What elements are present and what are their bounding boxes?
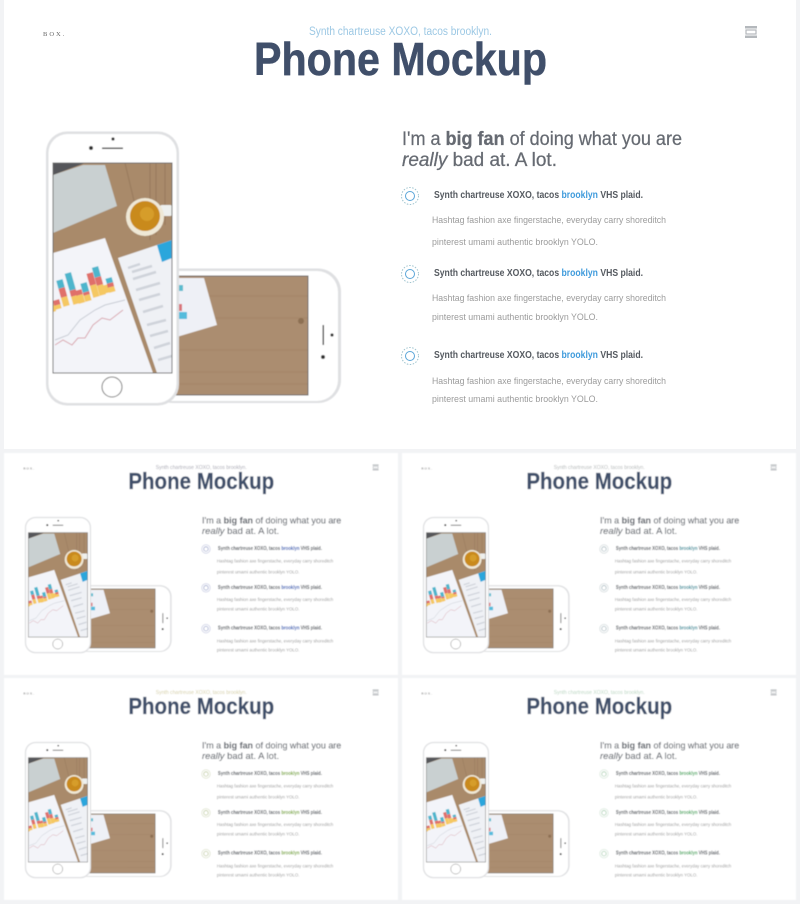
panel: small slide bottom left: Synth chartreuse XOXO, tacos brooklyn VHS plaid. [218, 851, 322, 857]
panel: small slide top right: BOX. [421, 466, 433, 470]
panel: small slide top left: BOX. [23, 466, 35, 470]
panel: small slide top left: Hashtag fashion axe fingerstache, everyday carry shoreditch [217, 639, 334, 645]
panel: small slide top right: Synth chartreuse XOXO, tacos brooklyn. [554, 465, 645, 471]
panel: small slide top left: Hashtag fashion axe fingerstache, everyday carry shoreditch [217, 597, 334, 603]
item 2 [402, 266, 666, 323]
heading second line: really bad at. A lot. [402, 150, 557, 171]
item 1: pinterest umami authentic brooklyn YOLO. [432, 237, 598, 248]
panel: small slide bottom right: Synth chartreuse XOXO, tacos brooklyn VHS plaid. [616, 851, 720, 857]
panel: small slide bottom right: Hashtag fashion axe fingerstache, everyday carry shoreditch [615, 783, 732, 789]
panel: small slide bottom right: pinterest umami authentic brooklyn YOLO. [615, 832, 698, 838]
panel: small slide top right: Hashtag fashion axe fingerstache, everyday carry shoreditch [615, 558, 732, 564]
panel: small slide bottom left: Hashtag fashion axe fingerstache, everyday carry shoreditch [217, 822, 334, 828]
panel: small slide top right [402, 453, 796, 675]
item 2: Synth chartreuse XOXO, tacos brooklyn VHS plaid. [434, 267, 643, 279]
item 2: Hashtag fashion axe fingerstache, everyday carry shoreditch [432, 293, 666, 304]
panel: small slide top right: Synth chartreuse XOXO, tacos brooklyn VHS plaid. [616, 585, 720, 591]
panel: small slide top left: Hashtag fashion axe fingerstache, everyday carry shoreditch [217, 558, 334, 564]
panel: small slide bottom left: pinterest umami authentic brooklyn YOLO. [217, 832, 300, 838]
panel: small slide top right: Hashtag fashion axe fingerstache, everyday carry shoreditch [615, 639, 732, 645]
panel: small slide top left: Synth chartreuse XOXO, tacos brooklyn VHS plaid. [218, 626, 322, 632]
panel: small slide bottom left: really bad at. A lot. [202, 751, 279, 762]
panel: small slide bottom right: Phone Mockup [526, 693, 672, 719]
phone mockups [46, 132, 341, 406]
panel: small slide bottom left: BOX. [23, 691, 35, 695]
panel: small slide top left: Synth chartreuse XOXO, tacos brooklyn VHS plaid. [218, 546, 322, 552]
panel: small slide top right: pinterest umami authentic brooklyn YOLO. [615, 607, 698, 613]
panel: small slide top right: Synth chartreuse XOXO, tacos brooklyn VHS plaid. [616, 546, 720, 552]
item 1 [402, 188, 666, 248]
panel: small slide bottom left: Synth chartreuse XOXO, tacos brooklyn VHS plaid. [218, 771, 322, 777]
panel: small slide top right: pinterest umami authentic brooklyn YOLO. [615, 647, 698, 653]
panel: small slide top right: I'm a big fan of doing what you are [600, 516, 739, 527]
panel: small slide top left: pinterest umami authentic brooklyn YOLO. [217, 607, 300, 613]
panel: small slide bottom right: pinterest umami authentic brooklyn YOLO. [615, 794, 698, 800]
panel: small slide bottom left: Synth chartreuse XOXO, tacos brooklyn. [156, 690, 247, 696]
panel: small slide top left: pinterest umami authentic brooklyn YOLO. [217, 569, 300, 575]
panel: small slide bottom left: pinterest umami authentic brooklyn YOLO. [217, 794, 300, 800]
item 1: Synth chartreuse XOXO, tacos brooklyn VHS plaid. [434, 189, 643, 201]
subtitle: Synth chartreuse XOXO, tacos brooklyn. [309, 26, 492, 38]
panel: small slide bottom left: Phone Mockup [128, 693, 274, 719]
panel: small slide bottom right: pinterest umami authentic brooklyn YOLO. [615, 872, 698, 878]
panel: small slide top right: Phone Mockup [526, 468, 672, 494]
item 1: Hashtag fashion axe fingerstache, everyday carry shoreditch [432, 215, 666, 226]
item 3: pinterest umami authentic brooklyn YOLO. [432, 394, 598, 405]
panel: small slide top left [4, 453, 398, 675]
item 3: Synth chartreuse XOXO, tacos brooklyn VHS plaid. [434, 349, 643, 361]
panel: small slide bottom right: Synth chartreuse XOXO, tacos brooklyn VHS plaid. [616, 771, 720, 777]
panel: small slide bottom right [402, 678, 796, 900]
panel: main slide [4, 0, 796, 449]
panel: small slide bottom right: Synth chartreuse XOXO, tacos brooklyn. [554, 690, 645, 696]
panel: small slide bottom right: BOX. [421, 691, 433, 695]
panel: small slide top left: I'm a big fan of doing what you are [202, 516, 341, 527]
panel: small slide top left: Synth chartreuse XOXO, tacos brooklyn VHS plaid. [218, 585, 322, 591]
panel: small slide top left: pinterest umami authentic brooklyn YOLO. [217, 647, 300, 653]
panel: small slide bottom left: I'm a big fan of doing what you are [202, 741, 341, 752]
icon: menu [745, 26, 757, 38]
panel: small slide bottom right: Hashtag fashion axe fingerstache, everyday carry shoreditch [615, 864, 732, 870]
panel: small slide bottom right: Synth chartreuse XOXO, tacos brooklyn VHS plaid. [616, 810, 720, 816]
panel: small slide top left: Phone Mockup [128, 468, 274, 494]
panel: small slide bottom left: Hashtag fashion axe fingerstache, everyday carry shoreditch [217, 783, 334, 789]
item 2: pinterest umami authentic brooklyn YOLO. [432, 312, 598, 323]
panel: small slide bottom right: Hashtag fashion axe fingerstache, everyday carry shoreditch [615, 822, 732, 828]
panel: small slide top right: really bad at. A lot. [600, 526, 677, 537]
panel: small slide top left: really bad at. A lot. [202, 526, 279, 537]
brand mark: BOX. [43, 31, 66, 38]
heading: I'm a big fan of doing what you are [402, 129, 682, 150]
panel: small slide top left: Synth chartreuse XOXO, tacos brooklyn. [156, 465, 247, 471]
item 3 [402, 348, 666, 405]
title: Phone Mockup [254, 33, 547, 85]
panel: small slide top right: pinterest umami authentic brooklyn YOLO. [615, 569, 698, 575]
panel: small slide bottom left [4, 678, 398, 900]
panel: small slide bottom right: really bad at. A lot. [600, 751, 677, 762]
panel: small slide top right: Hashtag fashion axe fingerstache, everyday carry shoreditch [615, 597, 732, 603]
panel: small slide bottom left: pinterest umami authentic brooklyn YOLO. [217, 872, 300, 878]
panel: small slide bottom left: Hashtag fashion axe fingerstache, everyday carry shoreditch [217, 864, 334, 870]
panel: small slide top right: Synth chartreuse XOXO, tacos brooklyn VHS plaid. [616, 626, 720, 632]
item 3: Hashtag fashion axe fingerstache, everyday carry shoreditch [432, 376, 666, 387]
panel: small slide bottom right: I'm a big fan of doing what you are [600, 741, 739, 752]
panel: small slide bottom left: Synth chartreuse XOXO, tacos brooklyn VHS plaid. [218, 810, 322, 816]
